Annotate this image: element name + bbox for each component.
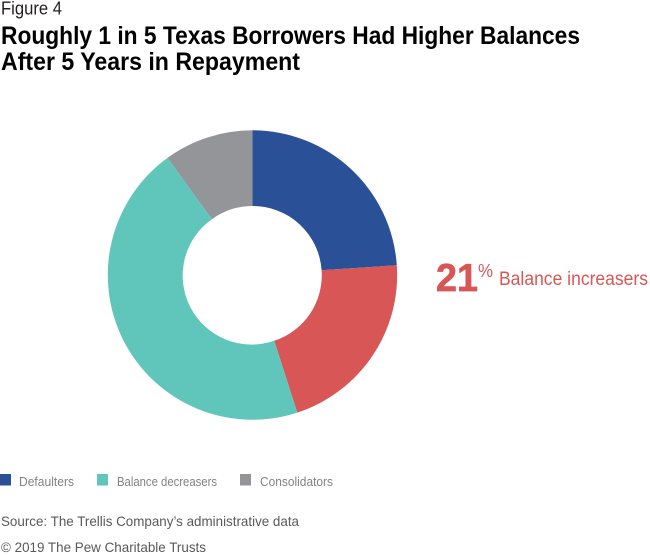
- title: [1, 22, 580, 76]
- copyright: © 2019 The Pew Charitable Trusts: [1, 539, 206, 555]
- segment: defaulters: [252, 130, 397, 270]
- title: After 5 Years in Repayment: [1, 48, 301, 76]
- title: Roughly 1 in 5 Texas Borrowers Had Higher Balances: [1, 22, 580, 50]
- legend item: consolidators: Consolidators: [260, 474, 333, 489]
- donut chart: [108, 130, 397, 420]
- callout: 21% balance increasers: %: [478, 261, 493, 281]
- segment: consolidators: [168, 130, 252, 219]
- legend item: balance decreasers: Balance decreasers: [117, 474, 217, 489]
- source note: Source: The Trellis Company’s administrative data: [1, 513, 299, 529]
- callout: 21% balance increasers: 21: [436, 257, 478, 300]
- legend item: defaulters: Defaulters: [19, 474, 74, 489]
- segment: balance increasers: [274, 265, 397, 413]
- segment: balance decreasers: [108, 158, 297, 420]
- callout: 21% balance increasers: [436, 257, 648, 300]
- legend: [0, 474, 333, 489]
